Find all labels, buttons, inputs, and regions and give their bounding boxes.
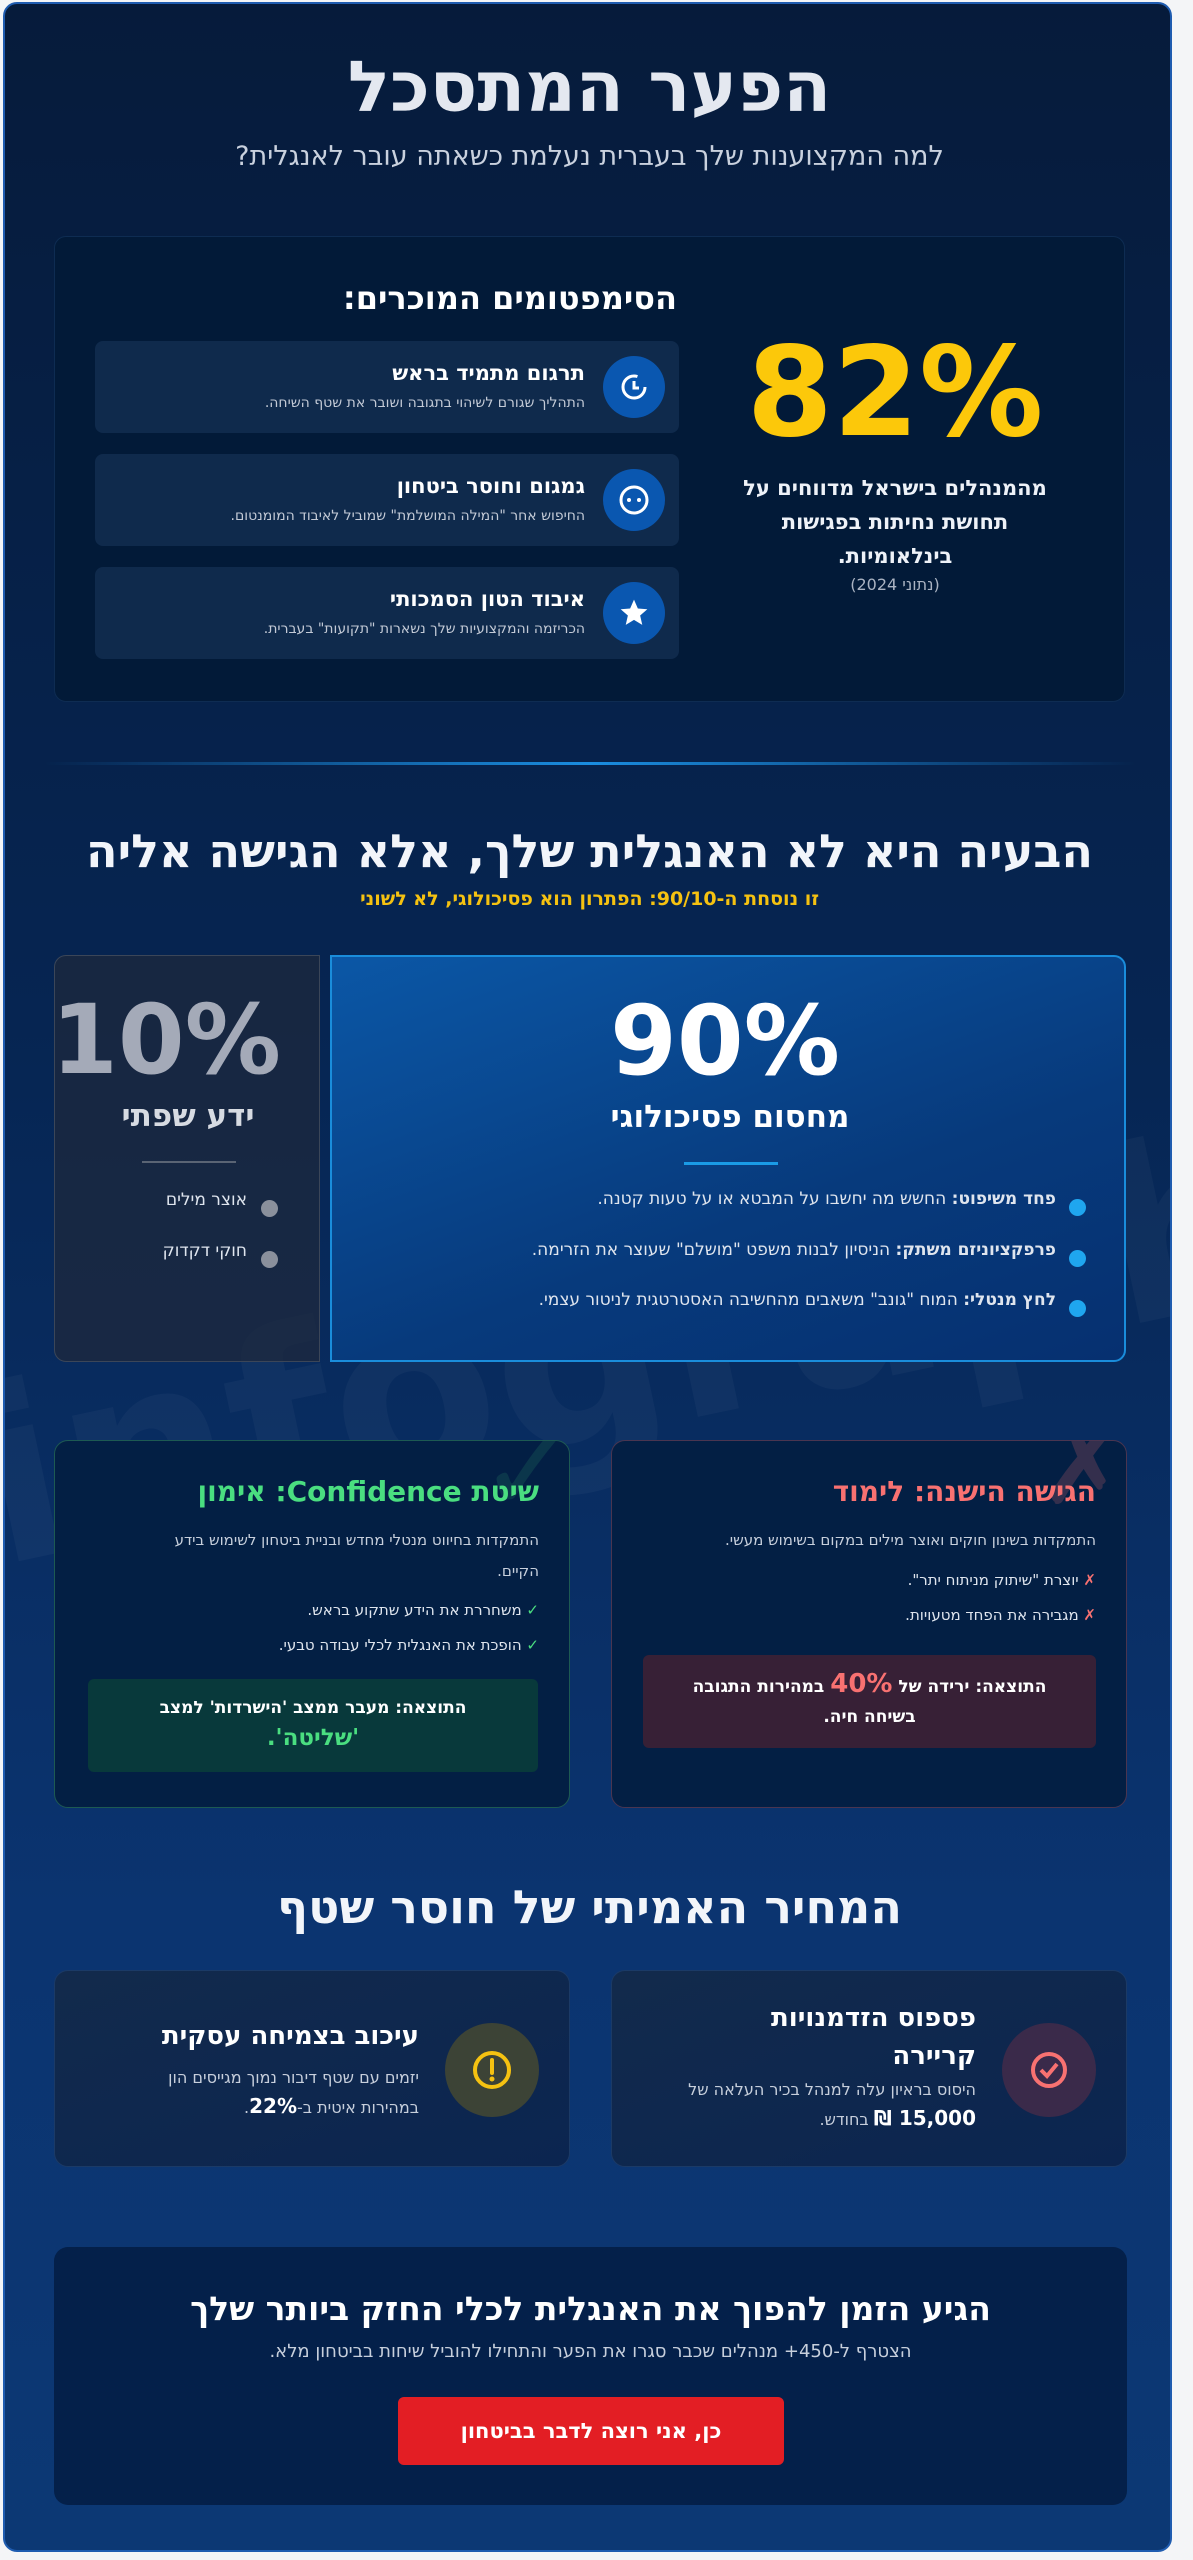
- symptom 2: [95, 454, 679, 546]
- panel: old approach: הגישה הישנה: לימוד: [833, 1475, 1096, 1508]
- card: career: היסוס בראיון עלה למנהל בכיר העלאה של 15,000 ₪ בחודש.: [688, 2080, 976, 2130]
- result box red: בשיחה חיה.: [823, 1707, 916, 1727]
- panel: 90%: פחד משיפוט: החשש מה יחשבו על המבטא או על טעות קטנה.: [597, 1189, 1056, 1209]
- panel: old approach: [611, 1440, 1127, 1808]
- subtitle: למה המקצוענות שלך בעברית נעלמת כשאתה עובר לאנגלית?: [235, 141, 944, 172]
- card: career: פספוס הזדמנויות: [771, 2003, 976, 2033]
- panel: 90%: לחץ מנטלי: המוח "גונב" משאבים מהחשיבה האסטרטגית לניטור עצמי.: [539, 1290, 1056, 1310]
- panel: confidence method: התמקדות בחיווט מנטלי מחדש ובניית ביטחון לשימוש בידע: [175, 1531, 539, 1549]
- button: כן, אני רוצה לדבר בביטחון: [461, 2419, 721, 2443]
- panel: 10%: [54, 955, 320, 1362]
- panel: CTA: הצטרף ל-450+ מנהלים שכבר סגרו את הפער והתחילו להוביל שיחות בביטחון מלא.: [269, 2341, 912, 2362]
- icon: star: [603, 582, 665, 644]
- heading: symptoms: הסימפטומים המוכרים:: [343, 279, 677, 317]
- panel: confidence method: [54, 1440, 570, 1808]
- symptom 3: איבוד הטון הסמכותי: [390, 587, 585, 611]
- symptom 1: [95, 341, 679, 433]
- symptom 3: [95, 567, 679, 659]
- panel: confidence method: הקיים.: [497, 1562, 539, 1580]
- panel: confidence method: ✓ הופכת את האנגלית לכלי עבודה טבעי.: [279, 1636, 539, 1654]
- panel: 90%: מחסום פסיכולוגי: [610, 1099, 849, 1135]
- panel: 90%: 90%: [610, 985, 840, 1097]
- result box red: התוצאה: ירידה של 40% במהירות התגובה: [693, 1669, 1046, 1699]
- panel: symptoms & stat: [54, 236, 1125, 702]
- panel: 10%: חוקי דקדוק: [163, 1241, 247, 1261]
- symptom 2: גמגום וחוסר ביטחון: [397, 474, 585, 498]
- result box green: 'שליטה'.: [267, 1725, 359, 1751]
- panel: 10%: 10%: [51, 984, 281, 1096]
- bullet 1: [1069, 1199, 1086, 1216]
- bullets: [261, 1200, 278, 1217]
- symptom 1: התהליך שגורם לשיהוי בתגובה ושובר את שטף השיחה.: [265, 395, 585, 411]
- stat 82%: 82%: [747, 321, 1043, 465]
- icon: face: [603, 469, 665, 531]
- panel: confidence method: ✓ משחררת את הידע שתקוע בראש.: [307, 1601, 539, 1619]
- subheading yellow: זו נוסחת ה-90/10: הפתרון הוא פסיכולוגי, לא לשוני: [360, 888, 819, 910]
- result box green: [88, 1679, 538, 1772]
- panel: CTA: הגיע הזמן להפוך את האנגלית לכלי החזק ביותר שלך: [190, 2289, 991, 2328]
- panel: 90%: [330, 955, 1126, 1362]
- symptom 2: החיפוש אחר "המילה המושלמת" שמוביל לאיבוד המומנטום.: [231, 508, 585, 524]
- panel: CTA: [54, 2247, 1127, 2505]
- bullet 3: [1069, 1300, 1086, 1317]
- result box red: [643, 1655, 1096, 1748]
- panel: 10%: אוצר מילים: [166, 1190, 247, 1210]
- stat source: (נתוני 2024): [850, 575, 940, 594]
- button: [398, 2397, 784, 2465]
- panel: confidence method: שיטת Confidence: אימון: [198, 1475, 539, 1508]
- icon: warning: [445, 2023, 539, 2117]
- card: career: קריירה: [892, 2041, 976, 2071]
- card: career: [611, 1970, 1127, 2167]
- bullet 2: [1069, 1250, 1086, 1267]
- icon: check: [1002, 2023, 1096, 2117]
- card: business growth: עיכוב בצמיחה עסקית: [162, 2021, 419, 2051]
- panel: old approach: ✗ מגבירה את הפחד מטעויות.: [905, 1606, 1096, 1624]
- panel: old approach: ✗ יוצרת "שיתוק מניתוח יתר".: [908, 1571, 1096, 1589]
- icon: clock: [603, 356, 665, 418]
- panel: 10%: ידע שפתי: [122, 1098, 254, 1134]
- result box green: התוצאה: מעבר ממצב 'הישרדות' למצב: [160, 1698, 466, 1718]
- symptom 3: הכריזמה והמקצועיות שלך נשארות "תקועות" בעברית.: [264, 621, 585, 637]
- panel: 90%: פרפקציוניזם משתק: הניסיון לבנות משפט "מושלם" שעוצר את הזרימה.: [532, 1240, 1056, 1260]
- card: business growth: [54, 1970, 570, 2167]
- stat caption: מהמנהלים בישראל מדווחים על תחושת נחיתות בפגישות בינלאומיות.: [743, 476, 1047, 568]
- panel: old approach: התמקדות בשינון חוקים ואוצר מילים במקום בשימוש מעשי.: [725, 1531, 1096, 1549]
- symptom 1: תרגום מתמיד בראש: [392, 361, 585, 385]
- heading: real cost: המחיר האמיתי של חוסר שטף: [277, 1880, 902, 1934]
- card: business growth: יזמים עם שטף דיבור נמוך מגייסים הון במהירות איטית ב-22%.: [168, 2068, 419, 2118]
- title: הפער המתסכל: [348, 46, 831, 128]
- heading: problem: הבעיה היא לא האנגלית שלך, אלא הגישה אליה: [86, 824, 1093, 878]
